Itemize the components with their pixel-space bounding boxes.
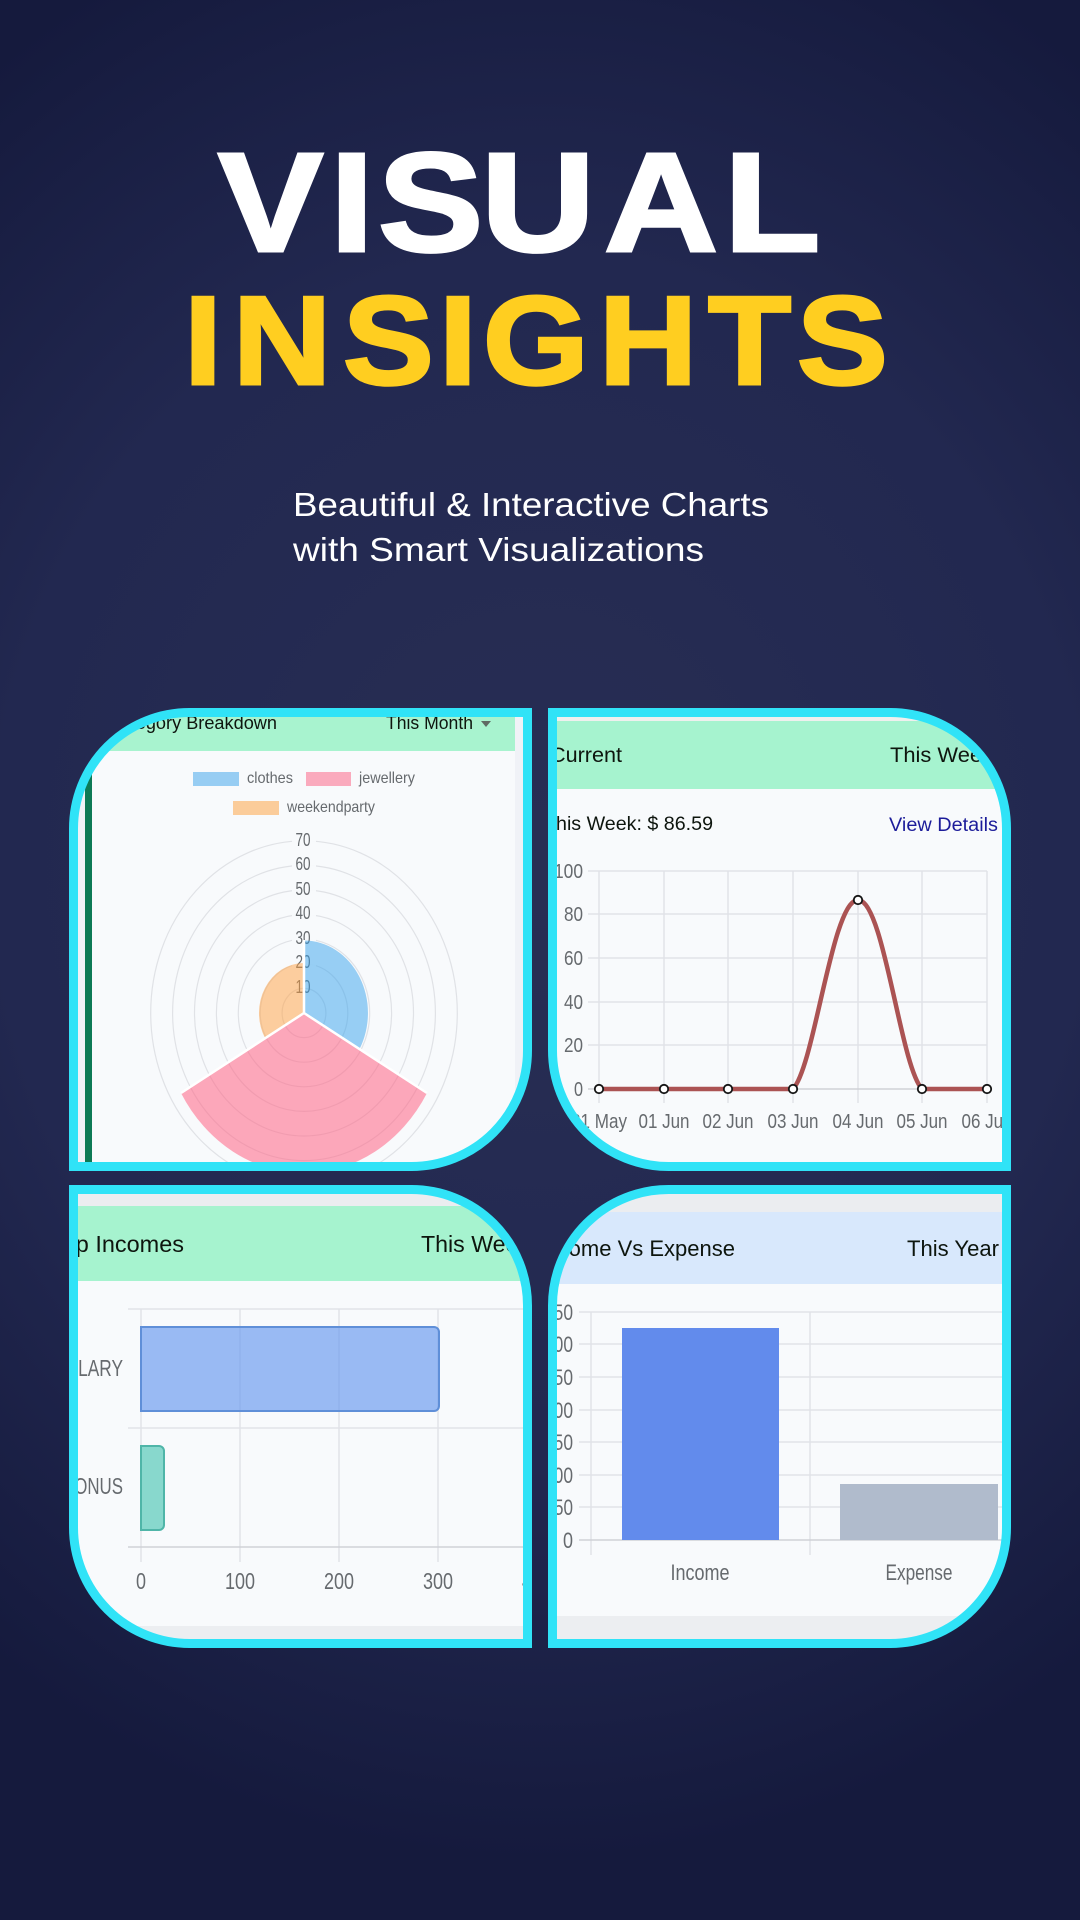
panel header — [110, 717, 515, 751]
y axis labels: 150 — [544, 1430, 573, 1455]
y axis labels: 200 — [544, 1398, 573, 1423]
panel border — [552, 1190, 1006, 1644]
panel: category breakdown polar chart: Category Breakdown — [108, 713, 277, 733]
x axis labels: 200 — [324, 1568, 354, 1594]
legend — [193, 770, 415, 816]
bar: expense — [840, 1484, 998, 1540]
x axis labels: 0 — [136, 1568, 146, 1594]
x axis labels: 100 — [225, 1568, 255, 1594]
panel: current week line chart: This Week — [890, 744, 994, 767]
y axis labels: 60 — [564, 948, 583, 970]
subtitle: Beautiful & Interactive Charts — [293, 486, 769, 523]
panel: top incomes bar chart: Top Incomes — [51, 1231, 184, 1257]
x axis labels: Income — [670, 1560, 730, 1585]
panel border — [74, 1190, 528, 1644]
category labels — [78, 1360, 123, 1494]
chart grid — [579, 1312, 1011, 1555]
polar scale labels: 20 — [296, 952, 310, 972]
y axis labels: 100 — [544, 1463, 573, 1488]
panel: current week line chart: Current — [550, 744, 622, 767]
panel header — [548, 1212, 1011, 1284]
x axis labels: 300 — [423, 1568, 453, 1594]
panel: income vs expense bar chart — [539, 1185, 1011, 1648]
panel: category breakdown polar chart: This Month — [386, 713, 473, 733]
x axis labels — [136, 1573, 523, 1589]
y axis labels: 50 — [554, 1495, 573, 1520]
x axis labels: 06 Jun — [962, 1111, 1012, 1133]
y axis labels: 300 — [544, 1332, 573, 1357]
panel: category breakdown polar chart — [69, 708, 532, 1185]
legend: clothes — [247, 770, 293, 787]
polar scale labels — [292, 830, 316, 997]
y axis labels: 0 — [574, 1079, 583, 1101]
x axis labels: 31 May — [571, 1111, 627, 1133]
green side bar — [85, 751, 92, 1171]
y axis labels — [557, 864, 582, 1096]
category labels: SALARY — [55, 1355, 123, 1381]
polar scale labels: 40 — [296, 903, 310, 923]
y axis labels: 0 — [563, 1528, 573, 1553]
y axis labels: 80 — [564, 904, 583, 926]
dropdown arrow — [481, 721, 491, 727]
x axis labels: Expense — [886, 1560, 952, 1585]
y axis labels: 100 — [554, 861, 583, 883]
polar scale labels: 70 — [296, 830, 310, 850]
x axis labels — [577, 1114, 1002, 1132]
line series — [599, 900, 987, 1089]
x axis labels: 01 Jun — [638, 1111, 690, 1133]
panel: income vs expense bar chart: This Year — [907, 1236, 999, 1261]
x axis labels: 04 Jun — [832, 1111, 884, 1133]
view details link: View Details — [889, 815, 998, 836]
title — [184, 123, 888, 411]
polar wedges — [181, 940, 427, 1173]
weekly total: This Week: $ 86.59 — [544, 813, 713, 835]
panel: top incomes bar chart — [51, 1185, 552, 1648]
panel: top incomes bar chart: This Week — [421, 1231, 531, 1257]
x axis labels: 03 Jun — [768, 1111, 818, 1133]
subtitle — [292, 486, 769, 568]
legend: jewellery — [358, 770, 415, 787]
polar scale labels: 30 — [296, 928, 310, 948]
y axis labels: 350 — [544, 1300, 573, 1325]
panel: current week line chart — [544, 708, 1012, 1171]
y axis labels — [557, 1304, 572, 1548]
y axis labels: 250 — [544, 1365, 573, 1390]
y axis labels: 20 — [564, 1035, 583, 1057]
title line: INSIGHTS: INSIGHTS — [184, 270, 888, 411]
panel header — [548, 721, 1011, 789]
chart grid — [588, 871, 987, 1103]
data points — [595, 896, 991, 1093]
subtitle: with Smart Visualizations — [292, 531, 704, 568]
bar: bonus — [141, 1446, 164, 1530]
x axis labels — [672, 1564, 952, 1584]
legend: weekendparty — [286, 799, 375, 816]
polar grid rings — [151, 841, 457, 1185]
y axis labels: 40 — [564, 992, 583, 1014]
panel border — [552, 712, 1006, 1166]
bar: income — [622, 1328, 779, 1540]
polar scale labels: 10 — [296, 977, 310, 997]
x axis labels: 05 Jun — [896, 1111, 948, 1133]
panel header — [69, 1206, 532, 1281]
category labels: BONUS — [63, 1473, 123, 1499]
bar: salary — [141, 1327, 439, 1411]
panel: income vs expense bar chart: Income Vs Expense — [539, 1236, 735, 1261]
x axis labels: 400 — [522, 1568, 552, 1594]
polar scale labels: 50 — [296, 879, 310, 899]
polar scale labels: 60 — [296, 854, 310, 874]
panel border — [74, 712, 528, 1166]
chart grid — [128, 1309, 537, 1562]
x axis labels: 02 Jun — [702, 1111, 754, 1133]
title line: VISUAL: VISUAL — [218, 123, 820, 281]
